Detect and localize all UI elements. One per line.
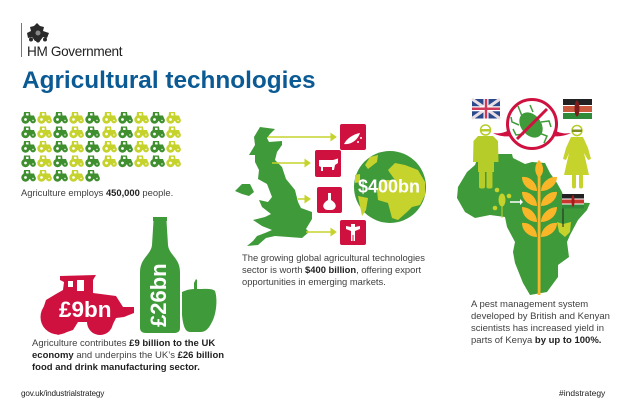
- market caption: The growing global agricultural technologies: [242, 252, 425, 263]
- map: United Kingdom: [235, 127, 312, 246]
- employment caption: Agriculture employs 450,000 people.: [21, 187, 173, 198]
- icon: Kenya flag: [563, 99, 592, 119]
- icon: red tractor with £9bn: [40, 275, 134, 335]
- export arrows: [268, 134, 336, 236]
- website footer: gov.uk/industrialstrategy: [21, 388, 104, 398]
- icon: globe with $400bn: $400bn: [358, 176, 420, 196]
- icon: cow tile: [315, 150, 341, 177]
- pest management caption: scientists has increased yield in: [471, 323, 604, 334]
- pest management caption: A pest management system: [471, 298, 588, 310]
- icon: scientist tile: [340, 220, 366, 245]
- icon: Kenya location marker: [557, 194, 584, 237]
- pest management caption: parts of Kenya by up to 100%.: [471, 335, 601, 346]
- icon: no pest sign: [493, 100, 571, 148]
- icon: red tractor with £9bn: £9bn: [59, 297, 112, 322]
- icon: green pepper: [182, 279, 216, 332]
- icon: green bottle with £26bn: [140, 217, 180, 333]
- map: Africa: [457, 154, 590, 295]
- icon: female scientist: [563, 126, 591, 188]
- icon: UK flag: [472, 99, 500, 118]
- icon: large wheat stalk: [522, 160, 557, 295]
- icon: flask tile: [317, 187, 342, 213]
- pest management caption: [471, 298, 610, 346]
- economy caption: food and drink manufacturing sector.: [32, 362, 200, 373]
- title: Agricultural technologies: [22, 67, 316, 94]
- divider and wordmark: HM Government: [27, 44, 122, 59]
- icon: globe with $400bn: [354, 151, 426, 223]
- icon: green bottle with £26bn: £26bn: [146, 263, 171, 327]
- icon: seed tile: [340, 124, 366, 150]
- market caption: sector is worth $400 billion, offering export: [242, 264, 421, 275]
- icon: small wheat with arrow: [493, 188, 523, 218]
- economy caption: [32, 338, 224, 373]
- pest management caption: developed by British and Kenyan: [471, 311, 610, 322]
- tractor pictogram grid: [23, 112, 181, 180]
- market caption: opportunities in emerging markets.: [242, 276, 386, 287]
- market caption: [242, 252, 425, 287]
- icon: male scientist: [473, 125, 498, 188]
- hashtag footer: #indstrategy: [559, 388, 605, 398]
- economy caption: Agriculture contributes £9 billion to the UK: [32, 338, 215, 349]
- icon: royal crest: [27, 23, 49, 42]
- divider and wordmark: [21, 23, 123, 57]
- economy caption: economy and underpins the UK’s £26 billion: [32, 350, 224, 361]
